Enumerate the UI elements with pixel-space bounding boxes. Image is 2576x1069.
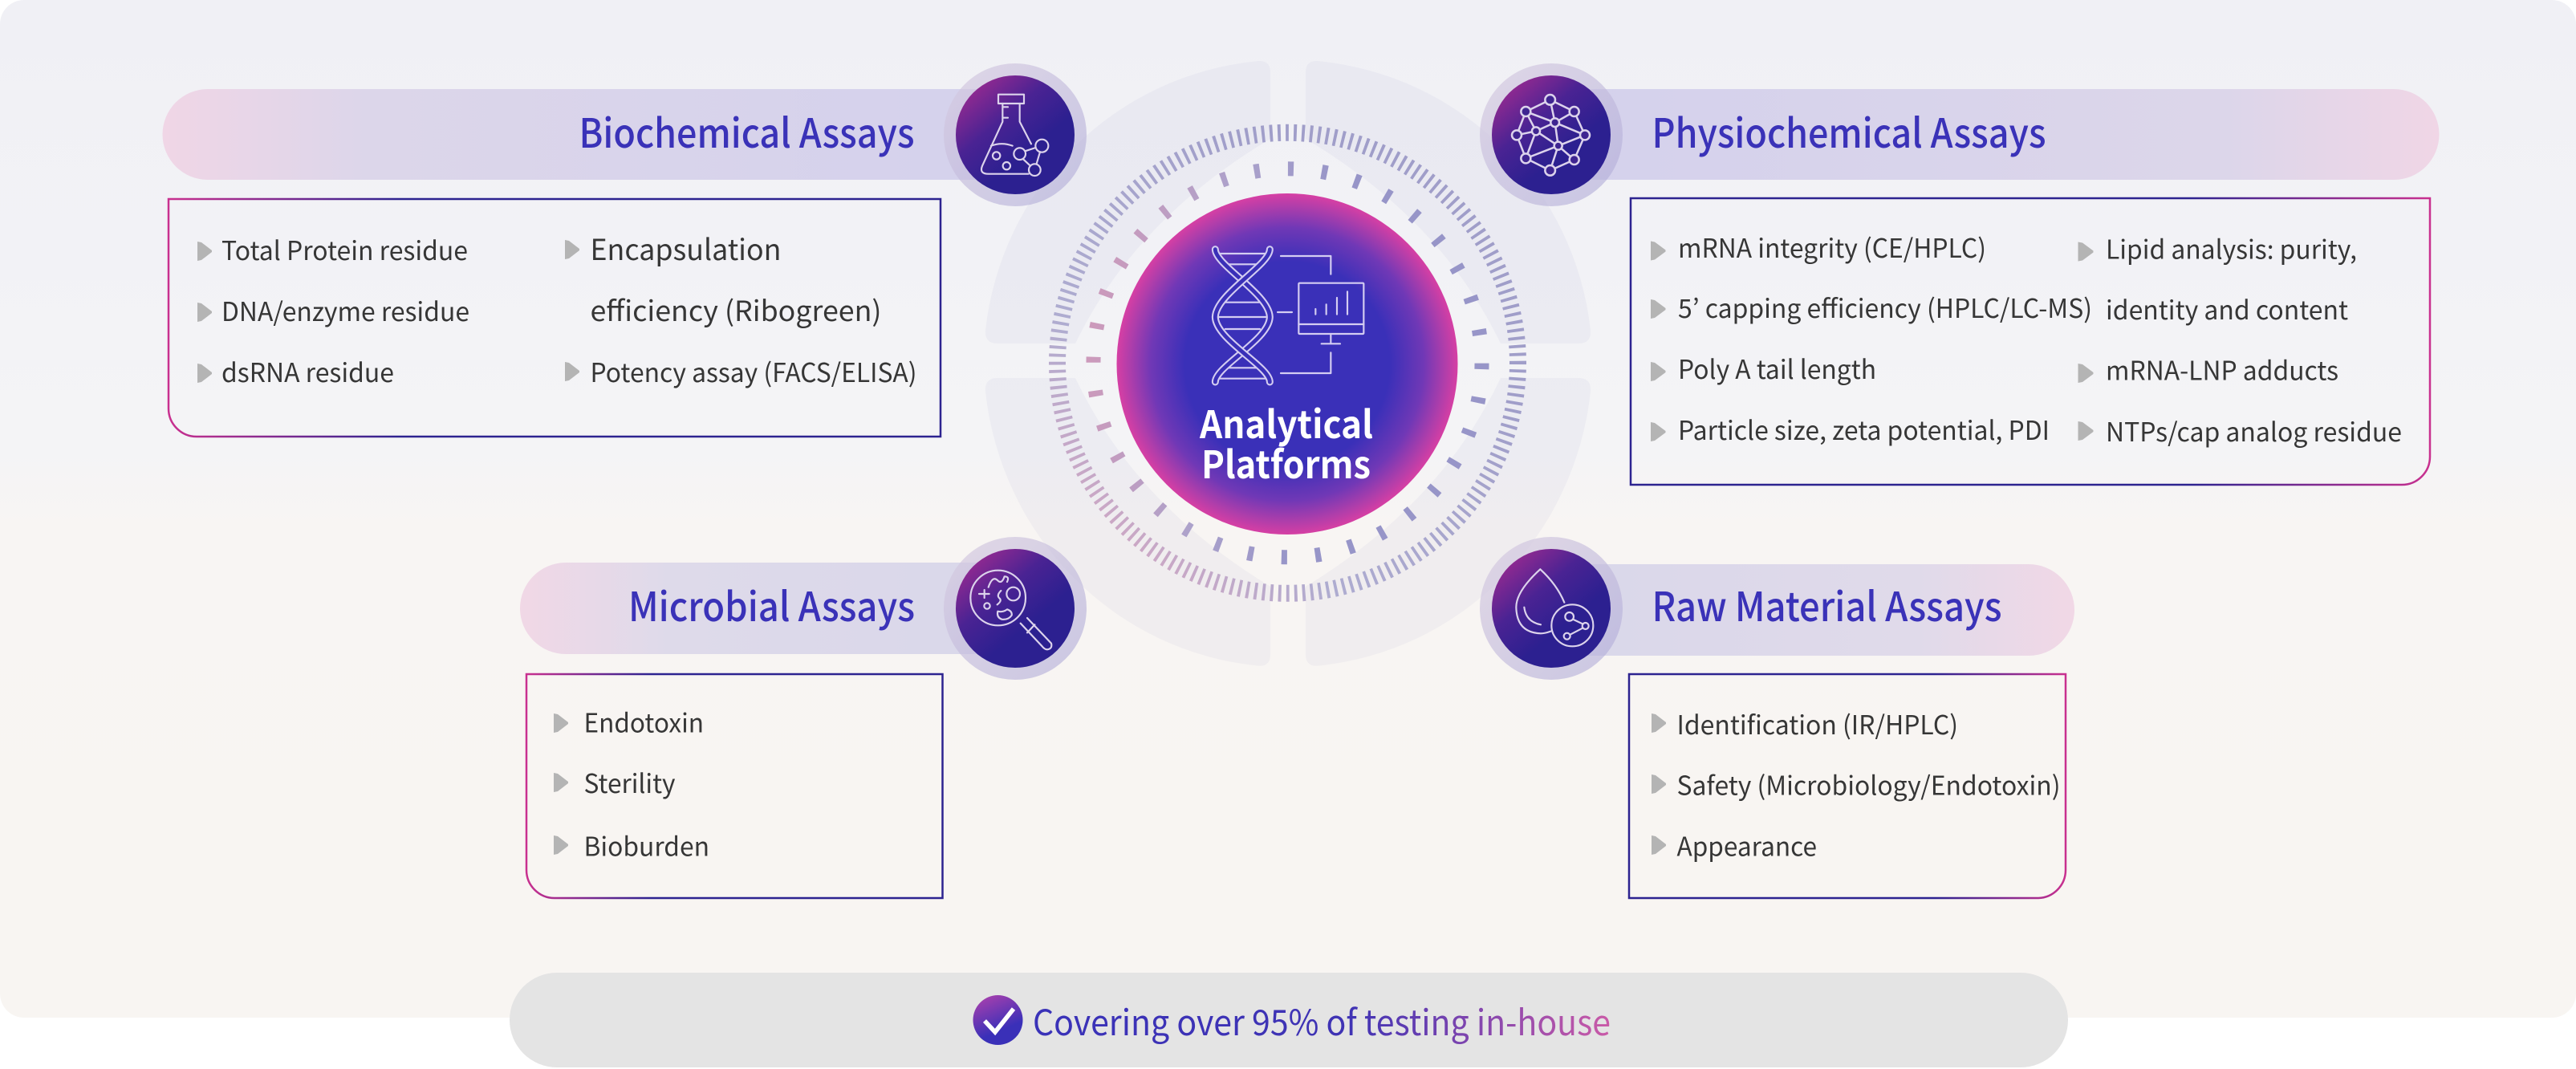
central hub: Analytical Platforms — [1117, 193, 1457, 534]
list items: Identification (IR/HPLC) — [1677, 705, 1958, 742]
heading: Microbial Assays — [628, 575, 915, 633]
icon: check badge — [973, 995, 1022, 1045]
list items: Particle size, zeta potential, PDI — [1678, 410, 2050, 448]
list items: Endotoxin — [584, 703, 704, 741]
list items: mRNA-LNP adducts — [2106, 350, 2338, 388]
list box — [169, 199, 941, 437]
list items — [1652, 705, 2061, 864]
list items: Poly A tail length — [1678, 349, 1876, 387]
callout pill — [510, 973, 2068, 1067]
heading: Physiochemical Assays — [1652, 102, 2046, 160]
heading bar — [520, 563, 1015, 654]
icon: molecular network — [1480, 63, 1623, 206]
inner tick ring — [1090, 165, 1485, 560]
panel: Microbial Assays — [520, 537, 1087, 898]
list items: 5’ capping efficiency (HPLC/LC-MS) — [1678, 288, 2092, 326]
panel: Physiochemical Assays — [1480, 63, 2440, 485]
list items: Potency assay (FACS/ELISA) — [591, 352, 916, 390]
background quadrant shapes — [985, 61, 1591, 666]
list items: Total Protein residue — [221, 230, 468, 268]
list items: Lipid analysis: purity, — [2106, 230, 2357, 266]
callout text: Covering over 95% of testing in-house — [1033, 994, 1611, 1046]
list items: Appearance — [1677, 827, 1817, 864]
heading bar — [1551, 89, 2440, 180]
list items: Sterility — [584, 763, 676, 801]
list items: DNA/enzyme residue — [221, 291, 469, 329]
list items — [554, 703, 709, 864]
list box — [1629, 674, 2066, 898]
callout: in-house coverage — [510, 973, 2068, 1067]
list box — [526, 674, 942, 898]
list items: efficiency (Ribogreen) — [591, 289, 881, 330]
list items: Encapsulation — [591, 227, 782, 269]
outer tick ring — [1058, 132, 1518, 593]
icon: droplet with network — [1480, 537, 1623, 680]
heading: Raw Material Assays — [1652, 575, 2001, 633]
icon: DNA to monitor — [1215, 250, 1363, 382]
list items: Safety (Microbiology/Endotoxin) — [1677, 766, 2061, 803]
list items: NTPs/cap analog residue — [2106, 412, 2402, 449]
list items — [1651, 228, 2402, 449]
hub title: Analytical — [1199, 394, 1373, 449]
list items: dsRNA residue — [221, 352, 394, 390]
panel: Biochemical Assays — [162, 63, 1087, 437]
panel: Raw Material Assays — [1480, 537, 2074, 898]
hub circle — [1117, 193, 1457, 534]
list items — [197, 227, 916, 390]
icon: magnifier with microbes — [944, 537, 1087, 680]
list box — [1631, 198, 2430, 485]
list items: identity and content — [2106, 290, 2348, 327]
heading bar — [1551, 564, 2074, 656]
hub title line 2: Platforms — [1201, 434, 1371, 490]
heading: Biochemical Assays — [579, 102, 915, 160]
icon: flask — [944, 63, 1087, 206]
heading bar — [162, 89, 1015, 180]
list items: Bioburden — [584, 827, 709, 864]
list items: mRNA integrity (CE/HPLC) — [1678, 228, 1986, 266]
